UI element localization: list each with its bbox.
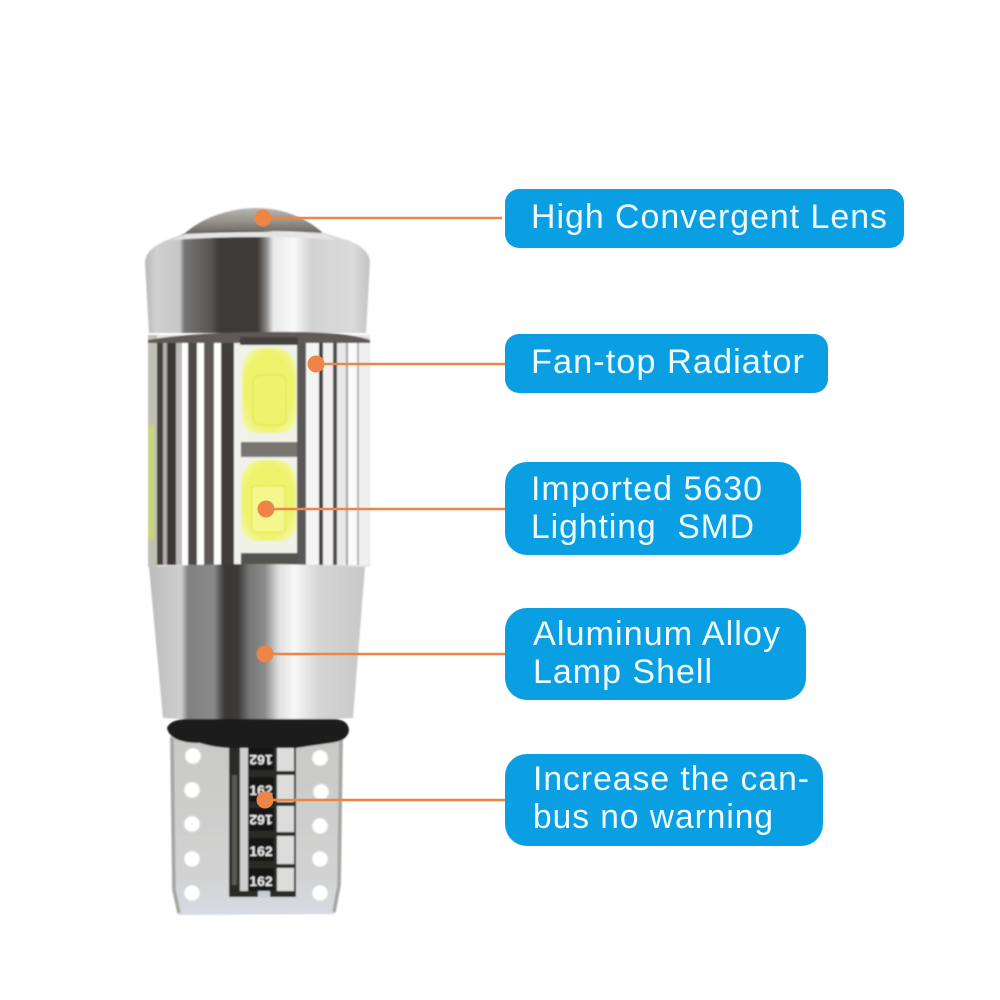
label: High Convergent Lens: High Convergent Lens xyxy=(531,198,888,236)
lower aluminum shell xyxy=(149,564,365,721)
label: Fan-top Radiator xyxy=(505,334,828,393)
radiator fins xyxy=(148,332,370,567)
label: Increase the can-bus no warning xyxy=(505,754,823,846)
callout line: lens xyxy=(254,210,502,226)
label: Imported 5630 Lighting SMD: Lighting SMD xyxy=(531,508,755,546)
label: Imported 5630 Lighting SMD xyxy=(505,462,801,555)
SMD chip upper xyxy=(240,345,297,442)
callout line: canbus xyxy=(256,792,506,808)
label: Fan-top Radiator: Fan-top Radiator xyxy=(531,343,805,381)
resistor strip: 162 xyxy=(249,752,273,768)
black rubber gasket xyxy=(167,719,349,748)
callout line: SMD xyxy=(258,500,506,518)
resistor strip: 162 xyxy=(249,812,273,828)
top metal cap xyxy=(145,231,370,333)
cap rim highlight xyxy=(172,232,338,240)
resistor strip: 162 xyxy=(249,873,273,889)
PCB base xyxy=(170,735,343,915)
label: Increase the can-bus no warning: Increase the can- xyxy=(533,760,810,798)
callout line: shell xyxy=(256,646,506,662)
resistor strip: 162 xyxy=(249,782,273,798)
label: Increase the can-bus no warning: bus no warning xyxy=(533,798,774,836)
label: Imported 5630 Lighting SMD: Imported 5630 xyxy=(531,470,763,508)
product photo: LED bulb xyxy=(145,208,370,915)
label: High Convergent Lens xyxy=(505,189,904,248)
lens dome xyxy=(184,208,324,234)
label: Aluminum Alloy Lamp Shell: Lamp Shell xyxy=(533,653,713,691)
label: Aluminum Alloy Lamp Shell xyxy=(505,608,806,700)
SMD chip lower xyxy=(240,457,297,553)
label: Aluminum Alloy Lamp Shell: Aluminum Alloy xyxy=(533,615,781,653)
callout line: radiator xyxy=(308,356,506,372)
resistor strip: 162 xyxy=(249,843,273,859)
solder holes xyxy=(184,748,329,901)
resistor strip xyxy=(229,745,296,897)
